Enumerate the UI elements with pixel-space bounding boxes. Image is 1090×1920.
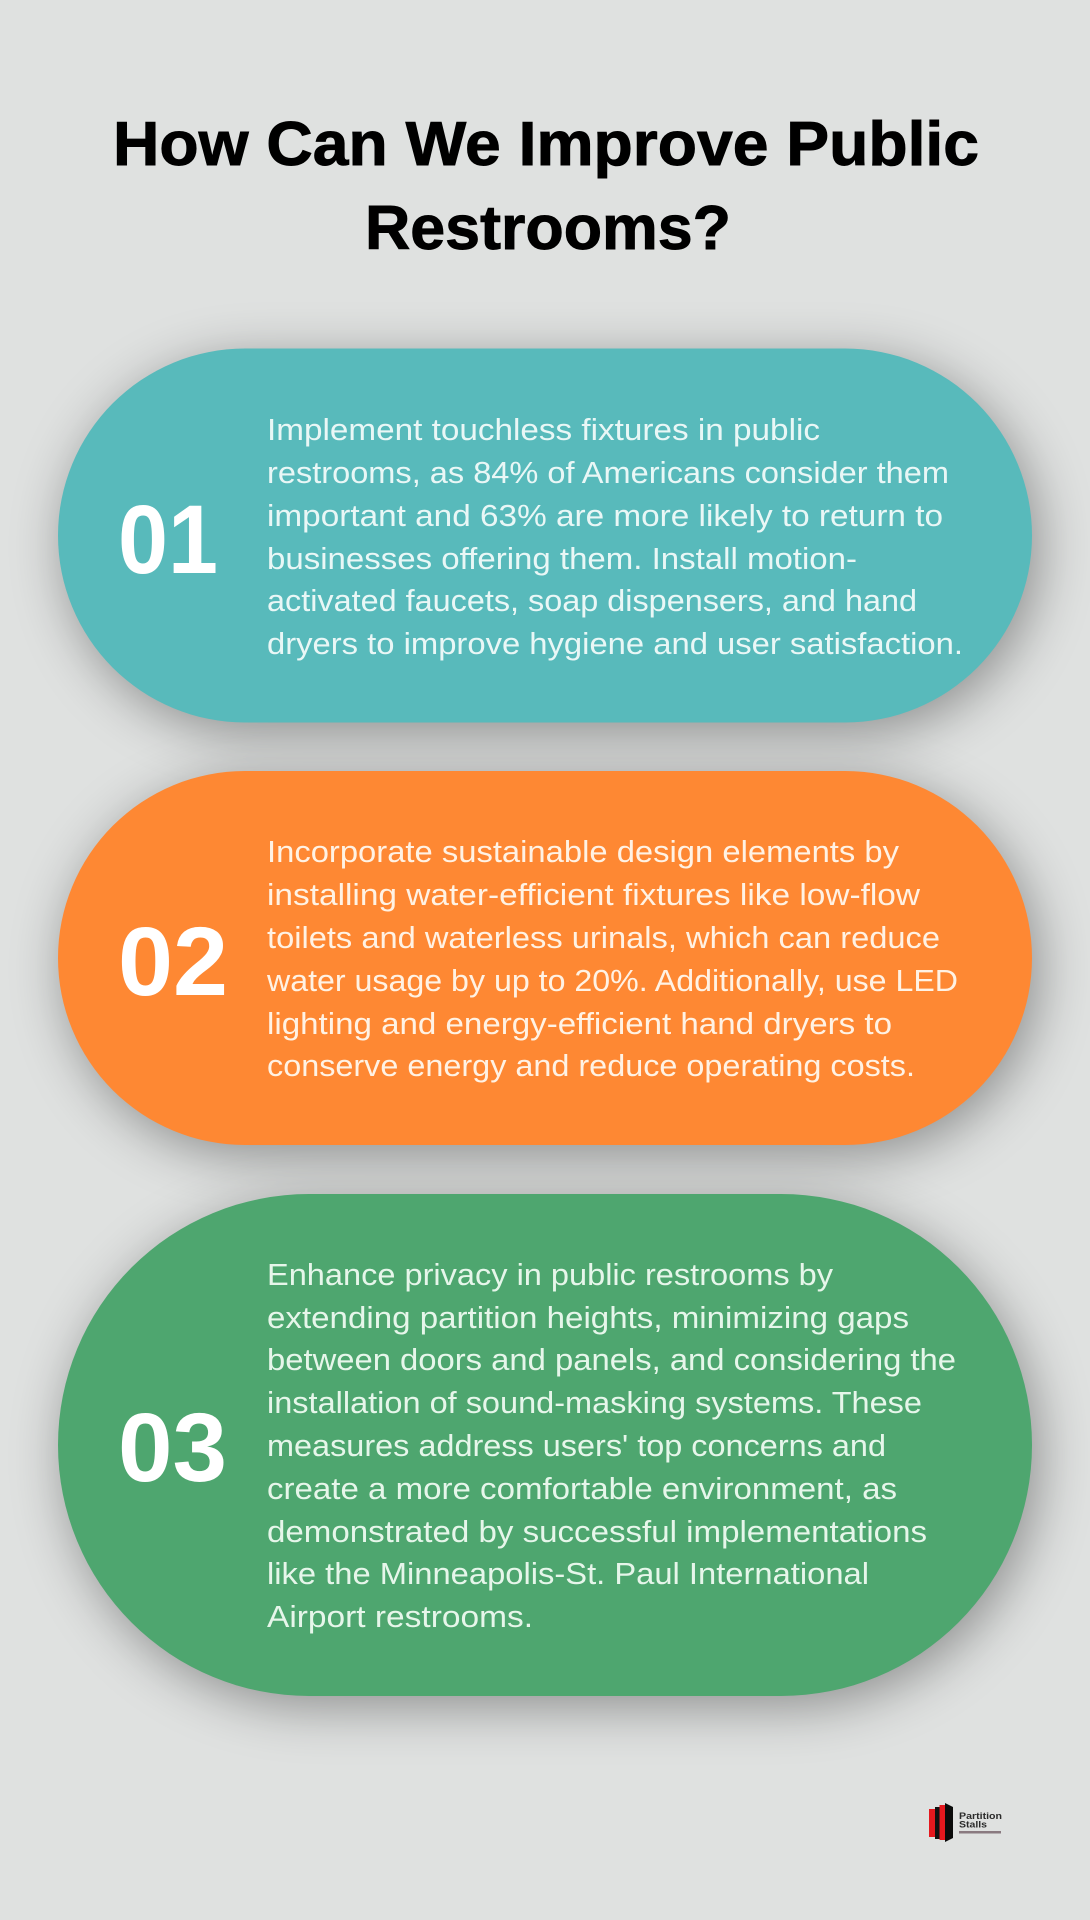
body text: step 02: Incorporate sustainable design elements by — [267, 834, 900, 869]
body text: step 01: dryers to improve hygiene and user satisfaction. — [267, 626, 963, 661]
green pill background — [58, 1194, 1032, 1696]
number 01: 01 — [118, 485, 218, 594]
body text: step 02: toilets and waterless urinals, which can reduce — [267, 920, 940, 955]
panel: step 03 privacy — [58, 1194, 1032, 1696]
body text: step 02: installing water-efficient fixtures like low-flow — [267, 877, 921, 912]
body text: step 03: installation of sound-masking systems. These — [267, 1385, 922, 1420]
logo wordmark — [959, 1811, 1002, 1834]
body text: step 03: between doors and panels, and considering the — [267, 1342, 956, 1377]
title: How Can We Improve Public — [113, 110, 979, 179]
body text: step 03: measures address users' top concerns and — [267, 1428, 886, 1463]
teal pill background — [58, 348, 1032, 722]
number 03: 03 — [118, 1393, 227, 1502]
body text: step 01: businesses offering them. Install motion- — [267, 541, 857, 576]
body text: step 03: Enhance privacy in public restrooms by — [267, 1257, 834, 1292]
body text: step 02 — [266, 834, 958, 1083]
panel: step 01 touchless fixtures — [58, 348, 1032, 722]
body text: step 03: like the Minneapolis-St. Paul International — [267, 1556, 869, 1591]
body text: step 01: important and 63% are more likely to return to — [267, 498, 943, 533]
body text: step 03: extending partition heights, minimizing gaps — [267, 1300, 909, 1335]
icon: partition bars — [929, 1803, 953, 1842]
title: Restrooms? — [365, 194, 731, 263]
logo wordmark: Partition — [959, 1811, 1002, 1822]
body text: step 03: demonstrated by successful implementations — [267, 1514, 927, 1549]
body text: step 01: Implement touchless fixtures in public — [267, 412, 820, 447]
panel: step 02 sustainable design — [58, 771, 1032, 1145]
orange pill background — [58, 771, 1032, 1145]
body text: step 03: Airport restrooms. — [267, 1599, 533, 1634]
logo: Partition Stalls — [929, 1803, 1002, 1842]
body text: step 01 — [267, 412, 963, 661]
body text: step 02: lighting and energy-efficient hand dryers to — [267, 1006, 892, 1041]
title — [113, 110, 979, 263]
body text: step 03 — [267, 1257, 956, 1634]
body text: step 01: restrooms, as 84% of Americans consider them — [267, 455, 949, 490]
logo wordmark: Stalls — [959, 1820, 987, 1830]
body text: step 02: water usage by up to 20%. Additionally, use LED — [266, 963, 958, 998]
number 02: 02 — [118, 907, 228, 1016]
body text: step 01: activated faucets, soap dispensers, and hand — [267, 583, 917, 618]
body text: step 02: conserve energy and reduce operating costs. — [267, 1048, 915, 1083]
body text: step 03: create a more comfortable environment, as — [267, 1471, 897, 1506]
